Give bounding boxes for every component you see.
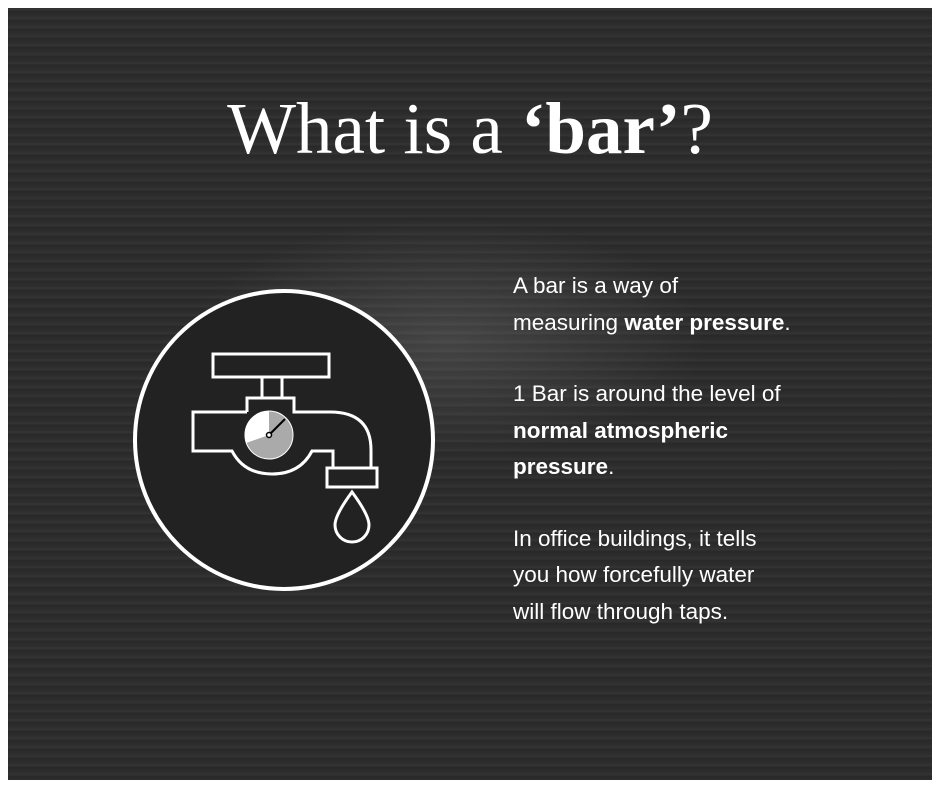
text block: normal atmospheric bbox=[513, 418, 728, 442]
title: What is a ‘bar’? bbox=[227, 88, 713, 169]
text block: measuring water pressure. bbox=[513, 310, 791, 334]
text block: you how forcefully water bbox=[513, 562, 754, 587]
text block: 1 Bar is around the level of bbox=[513, 381, 781, 406]
text block bbox=[513, 273, 791, 624]
text block: pressure. bbox=[513, 454, 614, 479]
text block: In office buildings, it tells bbox=[513, 526, 756, 550]
text block: A bar is a way of bbox=[513, 273, 678, 298]
text block: will flow through taps. bbox=[513, 598, 728, 624]
